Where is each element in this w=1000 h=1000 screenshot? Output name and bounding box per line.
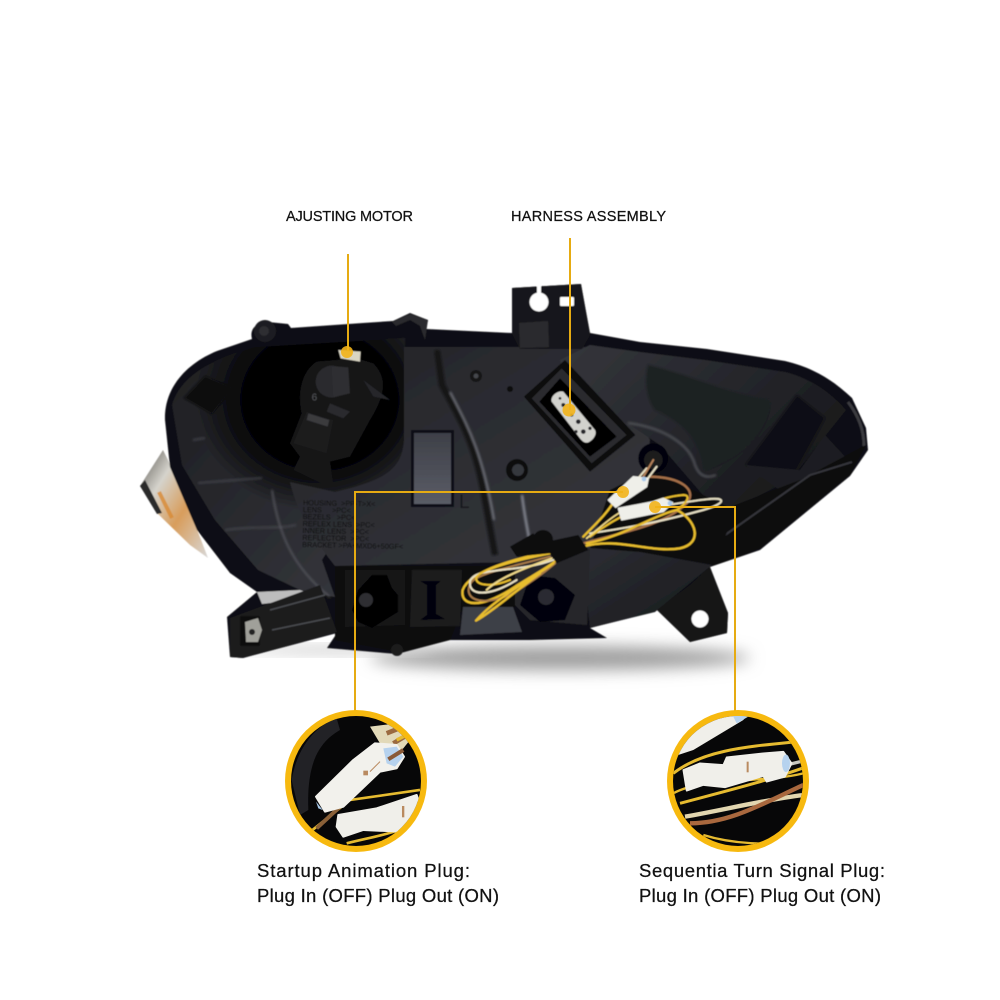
top left knob [254, 320, 276, 342]
lower right panel [587, 548, 712, 628]
material marking text [302, 498, 404, 551]
lower mounting tab [657, 567, 728, 642]
right reflector bowl [560, 345, 846, 515]
detail circle: startup animation plug [285, 710, 427, 852]
window cutout in wall [184, 376, 232, 414]
material marking text: HOUSING >PP-T>X< [303, 498, 375, 509]
label: harness assembly: HARNESS ASSEMBLY [511, 209, 666, 225]
black cavity [198, 338, 406, 501]
curved panel ridge [437, 350, 495, 555]
headlight assembly [140, 284, 868, 658]
caption: sequential turn signal plug [639, 860, 885, 906]
top bracket [512, 284, 590, 349]
detail circle: sequential turn signal plug [667, 710, 809, 852]
material marking text: INNER LENS >PC< [302, 526, 369, 536]
top clip [392, 314, 428, 340]
material marking text: REFLECTOR >PC< [302, 533, 369, 543]
marking letter L: L [459, 492, 470, 513]
adjusting motor: 6 [312, 393, 318, 404]
leader line: adjusting motor [341, 254, 353, 358]
tape wrap [510, 533, 588, 563]
caption: startup animation plug: Plug In (OFF) Plug Out (ON) [257, 885, 499, 906]
leader line: startup animation plug [355, 486, 629, 712]
left inner wall [172, 338, 405, 597]
material marking text: BEZELS >PC< [303, 512, 356, 522]
material marking text: BRACKET >PA+MXD6+50GF< [302, 540, 403, 551]
plug 1 [608, 477, 648, 507]
leader line: harness assembly [562, 238, 576, 416]
lower right black rim [690, 445, 866, 565]
caption: startup animation plug [257, 860, 499, 906]
material marking text: REFLEX LENS >PC< [302, 519, 375, 530]
right socket [520, 575, 575, 622]
silver reflection lower left [257, 590, 322, 604]
harness connector socket [524, 360, 668, 473]
right side wall [745, 435, 850, 505]
lower left bracket [230, 585, 337, 658]
label: adjusting motor: AJUSTING MOTOR [286, 209, 413, 225]
wire grommet [638, 443, 668, 473]
plug 2 [618, 498, 673, 520]
adjusting motor [290, 350, 390, 486]
wiring harness [462, 460, 721, 621]
ground shadow [245, 645, 750, 670]
bottom socket strip [335, 566, 515, 656]
caption: startup animation plug: Startup Animation Plug: [257, 860, 470, 881]
front lens edge [140, 450, 208, 558]
small boss on panel [470, 370, 553, 550]
caption: sequential turn signal plug: Sequentia Turn Signal Plug: [639, 860, 885, 881]
material marking text: LENS >PC< [303, 505, 351, 515]
housing silhouette [165, 284, 868, 658]
dark wire recess [590, 470, 735, 565]
caption: sequential turn signal plug: Plug In (OFF) Plug Out (ON) [639, 885, 881, 906]
leader line: turn signal plug [649, 501, 735, 712]
wall highlights [193, 438, 330, 597]
inspection window [411, 430, 454, 507]
central grey panel [290, 347, 650, 566]
